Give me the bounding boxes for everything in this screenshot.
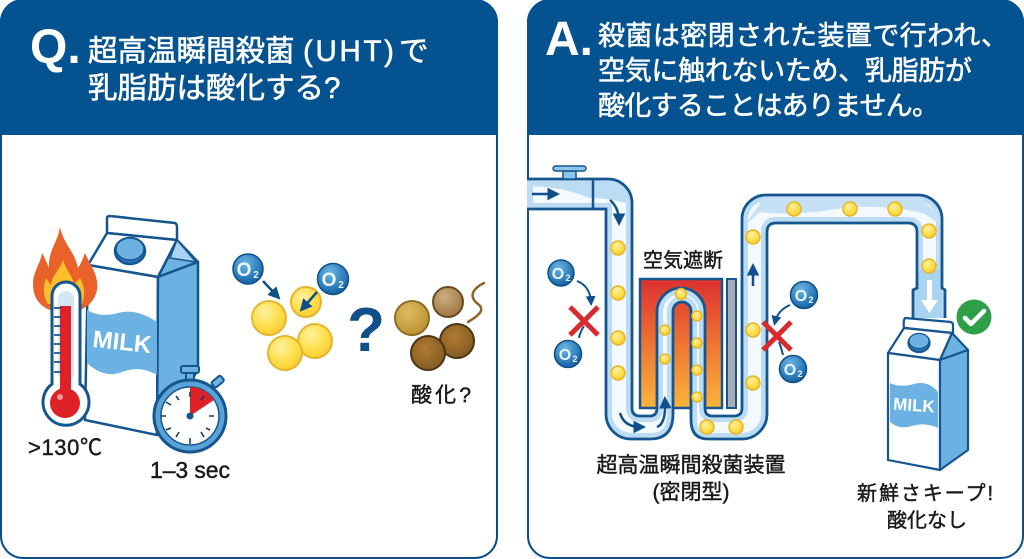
blocked oxygen left: 2 <box>572 354 578 364</box>
icon: stopwatch <box>154 366 226 452</box>
blocked oxygen right <box>763 282 818 382</box>
blocked oxygen right: 2 <box>797 369 803 379</box>
flow arrows <box>532 194 753 427</box>
blocked oxygen left: O <box>559 347 571 364</box>
milk label right: MILK <box>893 395 936 416</box>
question mark: ? <box>347 296 385 365</box>
air barrier label: 空気遮断 <box>643 249 723 272</box>
question heading: で <box>399 35 429 68</box>
icon: thermometer <box>43 282 89 425</box>
insulation bar <box>727 279 736 408</box>
fat globules in pipe <box>611 202 936 434</box>
milk carton right <box>888 318 968 470</box>
valve <box>553 166 586 179</box>
blocked oxygen right: O <box>795 288 807 305</box>
answer heading: 空気に触れないため、乳脂肪が <box>598 56 972 86</box>
answer heading: 殺菌は密閉された装置で行われ、 <box>598 21 1008 51</box>
oxygen molecule 2 with arrow: O <box>322 270 336 291</box>
oxidized label: 酸化? <box>411 384 471 407</box>
fresh fat globules <box>252 287 332 370</box>
red cross left <box>570 307 598 335</box>
icon: flame <box>33 227 97 310</box>
temperature label: >130℃ <box>28 435 102 460</box>
question header band <box>0 0 498 135</box>
blocked oxygen left: O <box>552 266 564 283</box>
panel: question <box>0 0 498 558</box>
icon: green check <box>956 300 992 334</box>
answer header band <box>527 0 1024 135</box>
heater unit <box>640 279 736 408</box>
oxygen molecule 2 with arrow: 2 <box>338 280 344 291</box>
sealed pipe <box>520 160 960 450</box>
red cross right <box>763 322 791 350</box>
oxygen molecule 1 with arrow: O <box>237 260 251 281</box>
question heading: (UHT) <box>303 35 394 68</box>
question heading: 乳脂肪は酸化する? <box>88 72 340 105</box>
milk carton left <box>85 216 198 435</box>
panel: answer <box>527 0 1024 558</box>
equipment label: 超高温瞬間殺菌装置 <box>596 454 786 477</box>
blocked oxygen left: 2 <box>565 273 571 283</box>
oxidized fat globules <box>395 283 484 370</box>
answer heading: 酸化することはありません。 <box>598 91 939 121</box>
oxygen molecule 1 with arrow: 2 <box>253 270 259 281</box>
white down arrow <box>921 280 938 313</box>
result label: 酸化なし <box>887 509 967 532</box>
question heading: 超高温瞬間殺菌 <box>88 35 295 68</box>
result label: 新鮮さキープ! <box>857 482 993 505</box>
milk label left: MILK <box>91 326 153 359</box>
oxygen molecule 2 with arrow <box>303 264 348 308</box>
duration label: 1–3 sec <box>150 457 230 483</box>
question mark letter: Q. <box>30 21 81 74</box>
blocked oxygen left <box>548 260 598 368</box>
blocked oxygen right: 2 <box>808 295 814 305</box>
equipment label: (密閉型) <box>652 481 730 504</box>
blocked oxygen right: O <box>784 362 796 379</box>
oxygen molecule 1 with arrow <box>233 254 277 296</box>
answer mark letter: A. <box>545 13 593 66</box>
